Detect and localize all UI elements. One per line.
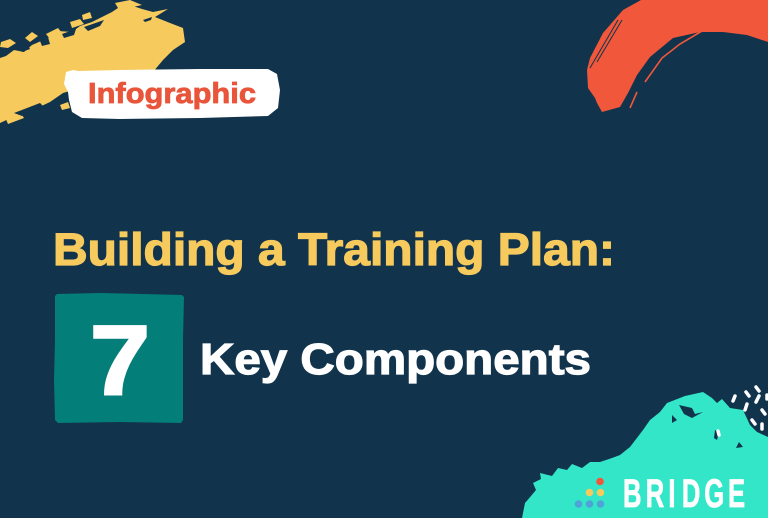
subtitle: Key Components — [200, 335, 591, 384]
number 7: 7 — [90, 305, 150, 415]
title: Building a Training Plan: — [53, 224, 615, 275]
teal brush shape — [522, 387, 768, 518]
paint flecks — [672, 405, 743, 448]
number badge — [54, 293, 184, 423]
label text: Infographic — [88, 78, 256, 110]
white infographic label — [64, 69, 280, 119]
bridge logo — [575, 472, 745, 517]
yellow brush stroke — [0, 0, 185, 124]
logo wordmark: BRIDGE — [623, 472, 745, 517]
logo dots — [575, 478, 604, 508]
red brush arc — [587, 0, 768, 112]
